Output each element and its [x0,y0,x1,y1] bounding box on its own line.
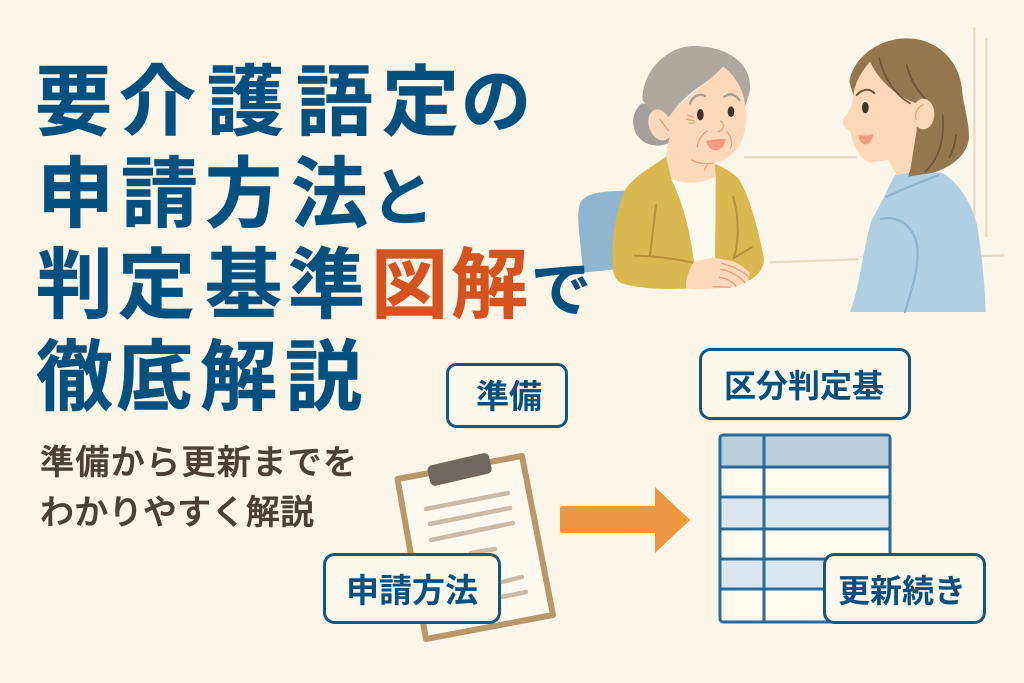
subtitle: わかりやすく解説 [40,494,314,532]
label: 更新続き: 更新続き [838,573,966,609]
highlighted word: 図解 [371,243,528,329]
icon: chair [578,191,626,273]
figure: care consultant [843,38,986,312]
label: 区分判定基: 区分判定基 [724,368,884,404]
title: 申請方法 [37,152,368,238]
subtitle [40,444,357,532]
title: の [461,63,531,141]
title [35,60,591,421]
label: 申請方法 [324,554,500,622]
title: で [531,257,591,324]
subtitle: 準備から更新までを [40,444,357,482]
label: 区分判定基 [700,350,910,418]
label: 更新続き [824,554,984,622]
illustration: consultation scene [578,28,1003,312]
label: 準備: 準備 [476,378,542,415]
title: と [371,164,434,234]
title: 徹底解説 [36,335,362,421]
title: 判定基準 [36,243,365,329]
label: 申請方法: 申請方法 [346,572,478,609]
icon: clipboard [398,452,553,639]
figure: elderly woman [613,46,764,289]
label: 準備 [448,364,566,426]
table chart [720,435,890,623]
arrow [560,487,690,553]
title: 要介護語定 [35,60,459,146]
